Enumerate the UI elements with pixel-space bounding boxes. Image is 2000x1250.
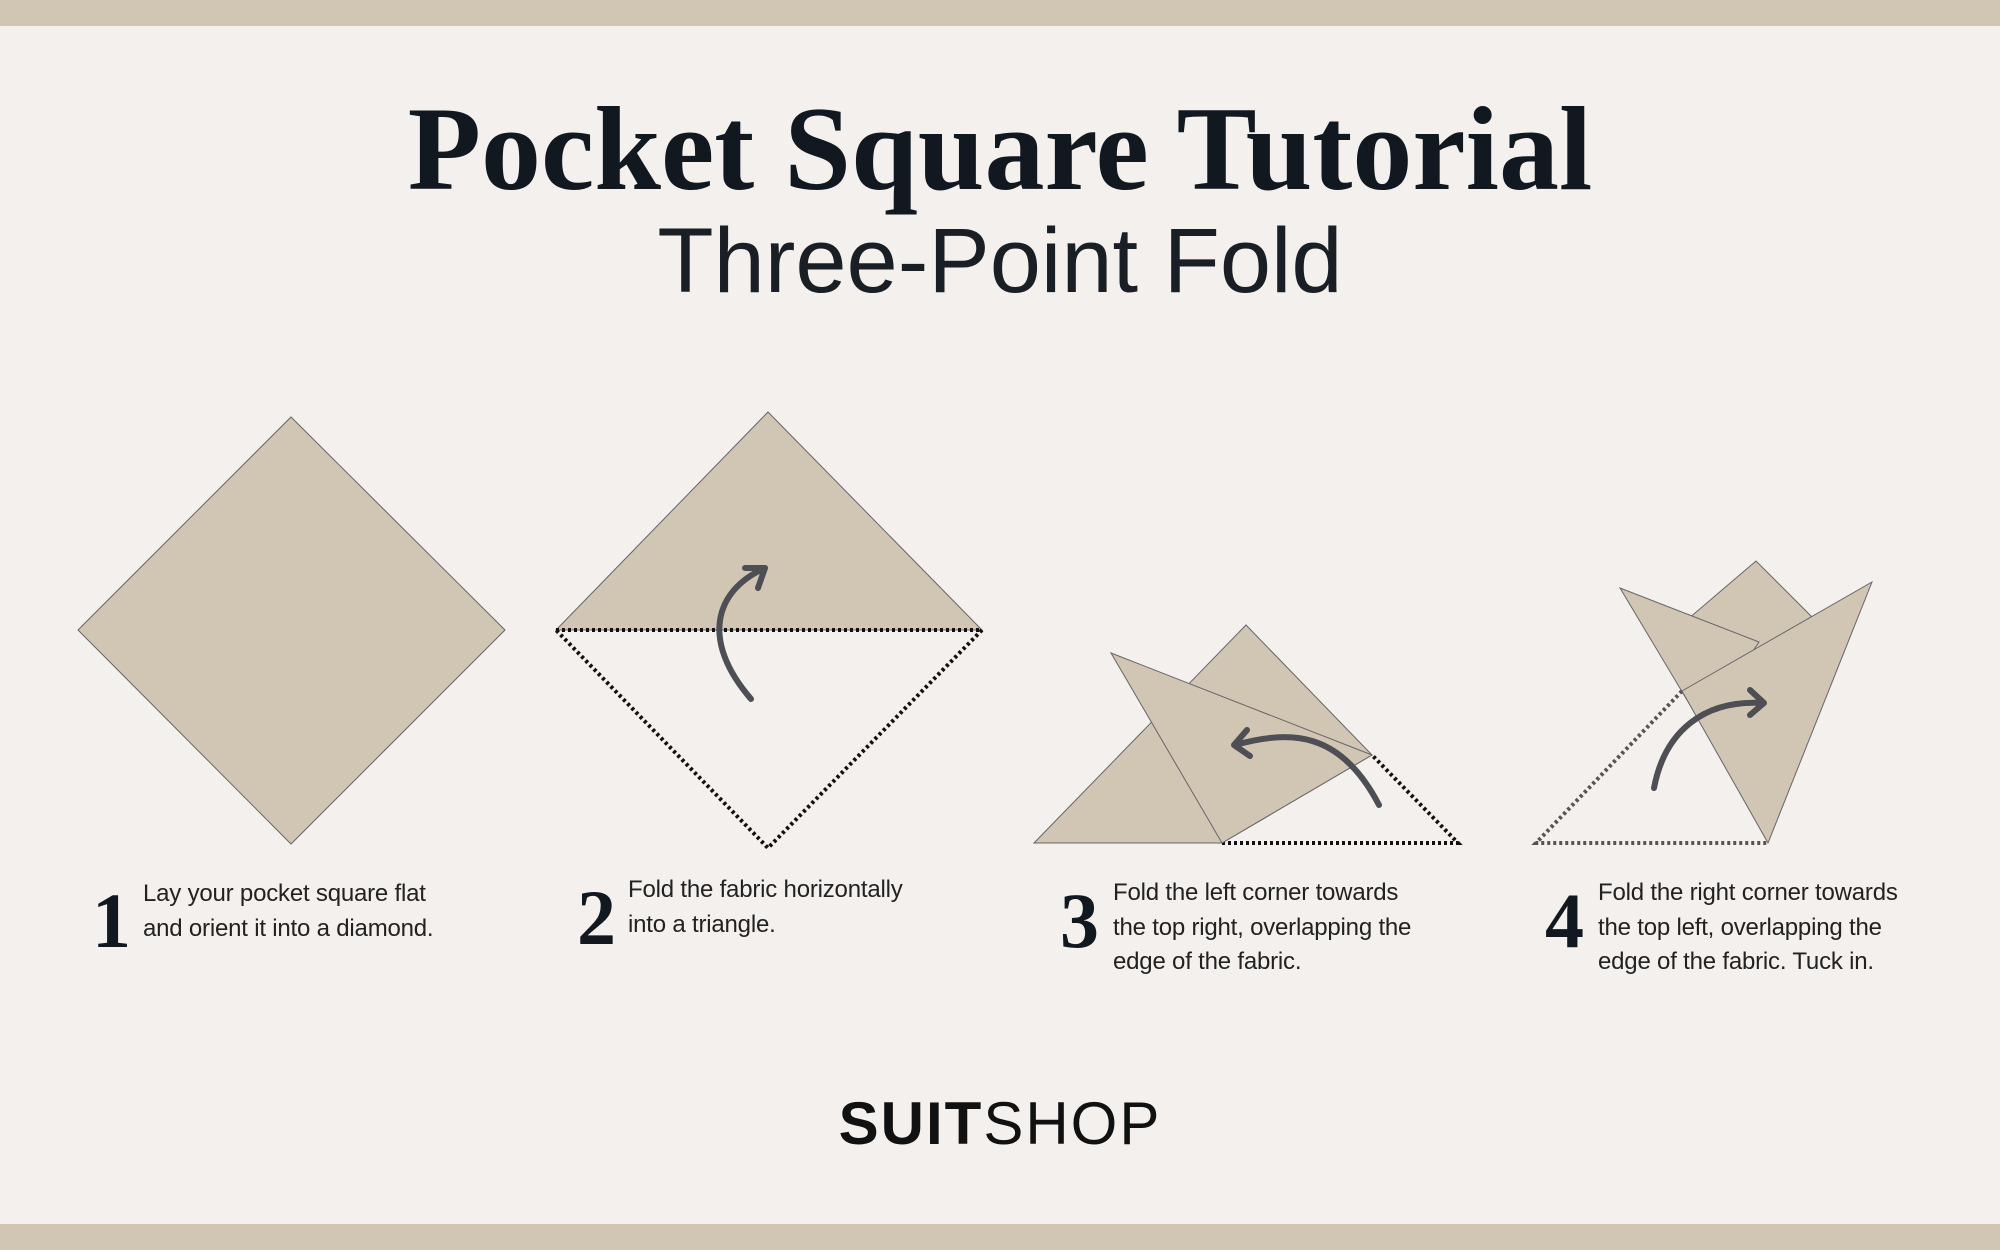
arrow step 2 bbox=[719, 568, 765, 699]
text: edge of the fabric. Tuck in. bbox=[1598, 948, 1874, 975]
step 1 diamond bbox=[78, 417, 505, 844]
step 2 triangle bbox=[556, 412, 982, 848]
title: Pocket Square Tutorial bbox=[408, 82, 1592, 215]
text: 1 bbox=[92, 877, 131, 964]
step 2 text bbox=[577, 874, 903, 961]
arrow step 4 bbox=[1654, 690, 1764, 788]
text: Fold the left corner towards bbox=[1113, 879, 1398, 906]
text: the top left, overlapping the bbox=[1598, 914, 1882, 940]
text: Lay your pocket square flat bbox=[143, 880, 426, 907]
text: and orient it into a diamond. bbox=[143, 914, 433, 942]
step 3 text bbox=[1060, 877, 1411, 975]
text: Fold the fabric horizontally bbox=[628, 876, 903, 903]
text: 2 bbox=[577, 874, 616, 961]
step 1 text bbox=[92, 877, 433, 964]
text: 4 bbox=[1545, 877, 1584, 964]
text: edge of the fabric. bbox=[1113, 948, 1301, 975]
step 4 text bbox=[1545, 877, 1898, 975]
text: 3 bbox=[1060, 877, 1099, 964]
logo: SUITSHOP bbox=[839, 1090, 1161, 1157]
text: Fold the right corner towards bbox=[1598, 879, 1898, 906]
text: the top right, overlapping the bbox=[1113, 914, 1411, 940]
subtitle: Three-Point Fold bbox=[657, 210, 1343, 312]
arrow step 3 bbox=[1234, 730, 1379, 805]
step 4 fold bbox=[1536, 561, 1872, 843]
text: into a triangle. bbox=[628, 910, 776, 938]
step 3 fold bbox=[1034, 625, 1458, 843]
